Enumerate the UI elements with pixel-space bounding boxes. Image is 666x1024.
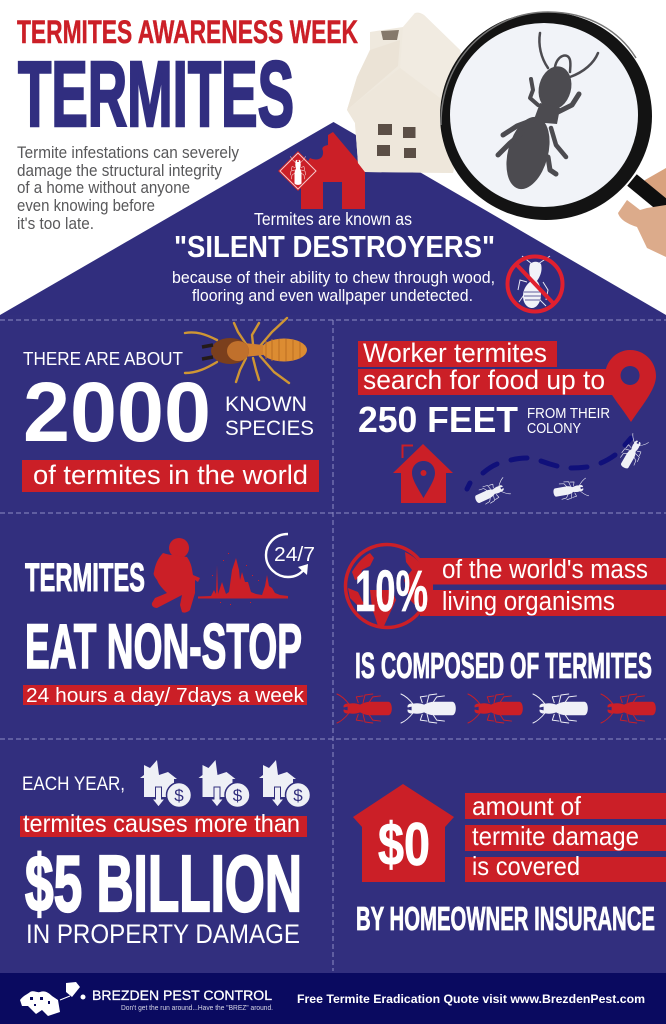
panel: roof: [0, 122, 666, 315]
icon: damaged house with dollar 3: $: [293, 786, 303, 805]
number: 2000: 2000: [23, 365, 211, 459]
panel: worker termites: [358, 338, 656, 508]
banner: termites causes more than: termites causes more than: [23, 810, 300, 838]
icon: damaged house with dollar 1: [140, 760, 192, 808]
text: tagline: Don't get the run around...Have the "BREZ" around.: [121, 1003, 273, 1012]
heading: Termites: TERMITES: [18, 42, 294, 146]
text: each year: EACH YEAR,: [22, 773, 125, 795]
icon: damaged house with dollar 3: [259, 760, 310, 808]
intro paragraph: it's too late.: [17, 214, 94, 233]
icon: red house with zero dollars: $0: [378, 811, 430, 878]
intro paragraph: [17, 143, 239, 233]
icon: magnifying glass: [440, 12, 652, 220]
text: free quote: Free Termite Eradication Quote visit www.BrezdenPest.com: [297, 992, 645, 1006]
icon: colony house: [393, 444, 453, 503]
banner: is covered: is covered: [472, 851, 580, 881]
panel: main body background: [0, 315, 666, 973]
banner: worker termites: Worker termites: [363, 338, 547, 368]
banner: termite damage: termite damage: [472, 821, 639, 851]
text: termites are known as: Termites are known as: [254, 209, 412, 229]
text: from their colony: [527, 406, 610, 437]
section dividers: [0, 320, 666, 971]
intro paragraph: Termite infestations can severely: [17, 143, 239, 162]
panel: insurance: [353, 784, 666, 937]
heading: eat non-stop: EAT NON-STOP: [25, 612, 302, 682]
text: known species: KNOWN: [225, 393, 307, 416]
icon: globe: [346, 544, 428, 628]
path: dashed trail: [467, 438, 631, 489]
icon: damaged house with dollar 2: $: [233, 786, 243, 805]
icon: damaged house with dollar 1: $: [174, 786, 184, 805]
icon: no termites: [508, 256, 562, 312]
text: company name: BREZDEN PEST CONTROL: [92, 987, 272, 1003]
banner: 24 hours a day: 24 hours a day/ 7days a week: [26, 684, 305, 707]
icon: crouching figure: [152, 538, 200, 613]
banner: is covered: [465, 851, 666, 882]
intro paragraph: damage the structural integrity: [17, 161, 222, 180]
text: from their colony: FROM THEIR: [527, 406, 610, 422]
chart: activity spikes: [198, 553, 288, 605]
banner: amount of: [465, 791, 666, 821]
icon: 24/7 clock arrow: 24/7: [274, 544, 315, 566]
icon: company logo figures: [20, 982, 86, 1016]
icon: damaged red house: [301, 132, 365, 209]
panel: 2000 species: [22, 318, 319, 492]
heading: silent destroyers: "SILENT DESTROYERS": [174, 229, 495, 264]
icon row: termites: [337, 694, 656, 723]
banner gap: [433, 584, 666, 590]
text: there are about: THERE ARE ABOUT: [23, 349, 183, 369]
panel: property damage: [20, 760, 310, 949]
icon: 24/7 clock arrow: [266, 534, 315, 577]
text: silent destroyers explanation: [172, 269, 495, 305]
photo: ceramic house: [347, 13, 475, 173]
number: 5 billion dollars: $5 BILLION: [25, 839, 302, 928]
text: of the world's mass: of the world's mass: [442, 556, 648, 584]
banner: amount of: amount of: [472, 791, 582, 821]
icon: termite silhouette in lens: [498, 33, 598, 194]
icon: termite warning diamond: [278, 151, 318, 191]
intro paragraph: even knowing before: [17, 196, 155, 215]
icon: hand and magnifier handle: [618, 168, 666, 257]
text: known species: [225, 393, 314, 440]
intro paragraph: of a home without anyone: [17, 178, 190, 197]
text: silent destroyers explanation: flooring and even wallpaper undetected.: [192, 287, 473, 305]
text: in property damage: IN PROPERTY DAMAGE: [26, 919, 300, 949]
panel: eat non-stop: [23, 534, 315, 707]
panel: footer: [0, 973, 666, 1024]
text: from their colony: COLONY: [527, 421, 581, 437]
icon: red house with zero dollars: [353, 784, 454, 882]
banner: world mass red block: [420, 558, 666, 616]
text: living organisms: living organisms: [442, 588, 615, 616]
text: known species: SPECIES: [225, 417, 314, 440]
banner: of termites in the world: of termites in the world: [33, 460, 308, 490]
number: 10 percent: 10%: [355, 559, 428, 624]
text: silent destroyers explanation: because of their ability to chew through wood,: [172, 269, 495, 287]
icon: brown termite: [185, 318, 307, 383]
number: 250 feet: 250 FEET: [358, 399, 518, 440]
heading: termites: TERMITES: [25, 556, 145, 600]
title: Termites Awareness Week: TERMITES AWARENESS WEEK: [17, 14, 358, 50]
icon: damaged house with dollar 2: [198, 760, 250, 808]
panel: 10 percent of world mass: [337, 544, 666, 723]
icon: walking termites: [472, 433, 648, 508]
icon: location pin: [605, 350, 656, 422]
banner: search for food: search for food up to: [363, 365, 605, 395]
